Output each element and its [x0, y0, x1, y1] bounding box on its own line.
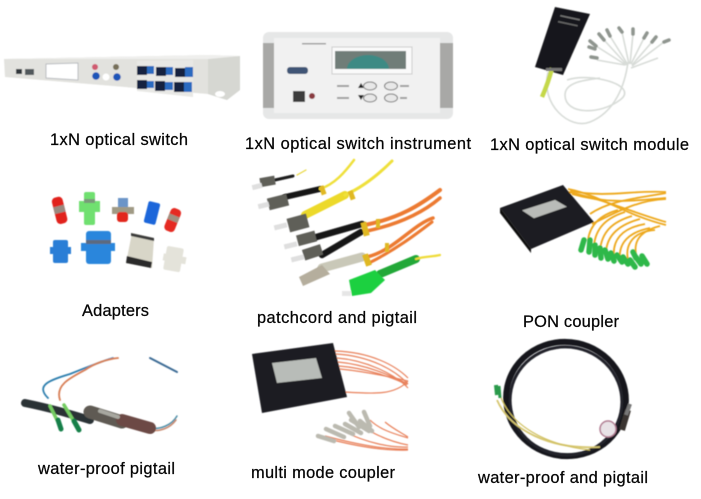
- panel: 1xN optical switch module: [490, 7, 689, 154]
- icon: multi mode coupler box and fibres: [252, 343, 408, 450]
- label: Adapters: [82, 302, 149, 320]
- panel: water-proof and pigtail: [477, 331, 648, 487]
- panel: 1xN optical switch: [4, 55, 240, 149]
- icon: connector heads: [252, 176, 389, 296]
- label: water-proof and pigtail: [477, 469, 648, 487]
- icon: rack mounted switch: [4, 55, 240, 100]
- panel: patchcord and pigtail: [252, 160, 440, 327]
- icon: switch module with fibres: [535, 7, 669, 124]
- label: water-proof pigtail: [37, 460, 175, 478]
- icon: water-proof cable assembly: [25, 358, 177, 431]
- icon: PON splitter box and fibres: [500, 185, 666, 267]
- icon: coiled water-proof cable: [495, 331, 637, 467]
- panel: multi mode coupler: [251, 343, 408, 482]
- label: 1xN optical switch: [50, 131, 188, 149]
- panel: 1xN optical switch instrument: [245, 32, 471, 153]
- icon: instrument front panel: [263, 32, 453, 119]
- panel: PON coupler: [500, 185, 666, 331]
- label: PON coupler: [523, 313, 620, 331]
- label: patchcord and pigtail: [257, 309, 417, 327]
- panel: water-proof pigtail: [25, 358, 177, 478]
- label: 1xN optical switch instrument: [245, 135, 471, 153]
- icon: patch cords and connectors: [275, 160, 440, 274]
- label: 1xN optical switch module: [490, 136, 689, 154]
- icon: coloured adapters: [50, 192, 186, 272]
- label: multi mode coupler: [251, 464, 396, 482]
- panel: Adapters: [50, 192, 186, 320]
